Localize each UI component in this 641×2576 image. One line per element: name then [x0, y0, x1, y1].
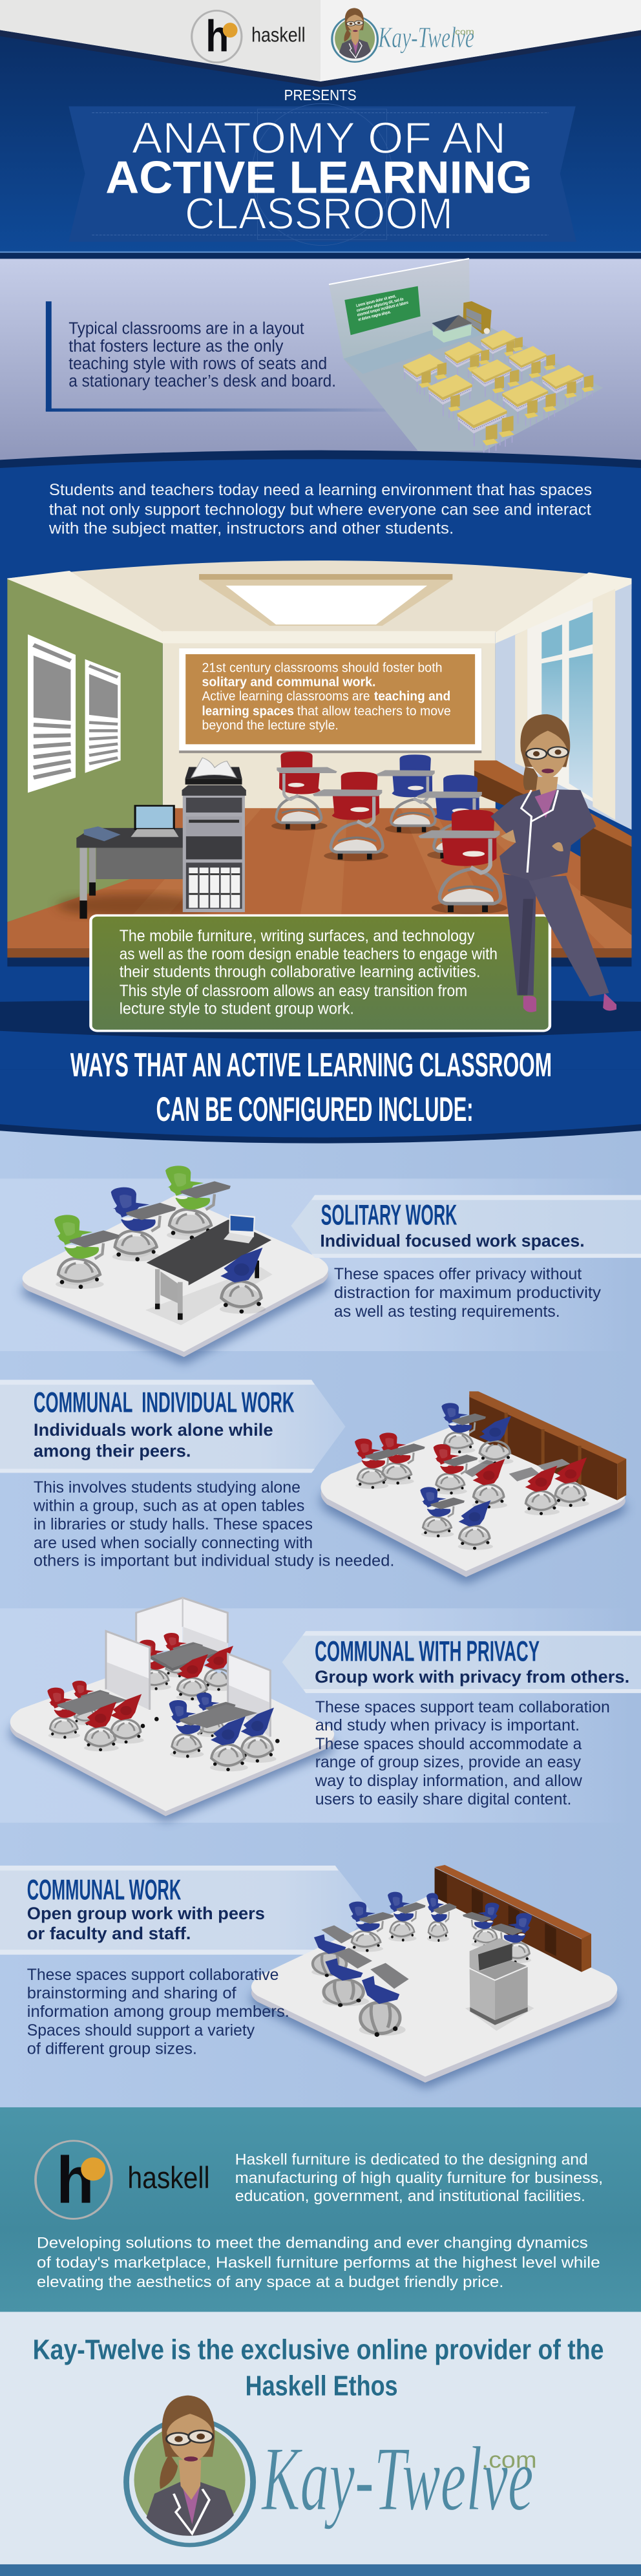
communal work subheading: or faculty and staff. [27, 1924, 191, 1943]
communal work podium [465, 1938, 534, 2031]
communal individual body: in libraries or study halls. These spaces [34, 1515, 313, 1533]
privacy banner [282, 1631, 641, 1693]
ceiling [7, 560, 631, 644]
communal individual banner [0, 1379, 346, 1473]
intro text: with the subject matter, instructors and other students. [48, 518, 454, 537]
panel: haskell teal [0, 2107, 641, 2312]
solitary body: These spaces offer privacy without [334, 1265, 582, 1283]
privacy platform [10, 1653, 334, 1823]
typical classroom text: a stationary teacher’s desk and board. [68, 372, 336, 390]
communal work body: information among group members. [27, 2003, 289, 2021]
section heading [70, 1047, 552, 1129]
title: ACTIVE LEARNING [105, 152, 532, 203]
communal individual bookshelf [469, 1391, 626, 1500]
footer heading: Haskell Ethos [246, 2370, 398, 2401]
panel: communal work: COMMUNAL WORK [27, 1873, 182, 1906]
panel: solitary work [0, 1166, 641, 1365]
privacy body: way to display information, and allow [315, 1772, 582, 1789]
communal individual subheading: among their peers. [34, 1441, 191, 1461]
Kay-Twelve logo: .com [452, 28, 474, 37]
blue title background [0, 0, 641, 253]
haskell logo large: haskell [127, 2160, 210, 2195]
title ribbon [68, 103, 576, 246]
whiteboard text: 21st century classrooms should foster both [202, 660, 443, 675]
left table group [47, 1681, 144, 1751]
communal individual body: This involves students studying alone [34, 1478, 300, 1496]
whiteboard text: Active learning classrooms are [202, 688, 370, 703]
blue heading band top [0, 1070, 641, 1137]
traditional classroom illustration: eiusmod tempor incididunt ut labore [357, 301, 409, 317]
haskell logo large [36, 2141, 210, 2219]
presents label: PRESENTS [284, 87, 357, 104]
Kay-Twelve logo [332, 8, 474, 62]
Kay-Twelve logo large: .com [481, 2447, 537, 2473]
communal work body: brainstorming and sharing of [27, 1984, 236, 2002]
callout text [120, 927, 498, 1017]
communal work banner [0, 1866, 370, 1955]
communal individual subheading [34, 1420, 273, 1461]
haskell paragraph [37, 2234, 600, 2291]
footer section [0, 2107, 641, 2576]
left divider [106, 1631, 150, 1710]
teacher figure [490, 714, 616, 1012]
wood counter [474, 760, 631, 935]
right wall and window [496, 584, 631, 829]
ceiling light [199, 574, 452, 626]
solitary body [334, 1265, 602, 1320]
callout text: their students through collaborative learning activities. [120, 963, 480, 981]
typical classroom text: teaching style with rows of seats and [68, 354, 327, 373]
haskell description [235, 2151, 603, 2205]
solitary furniture [54, 1166, 273, 1325]
communal work subheading: Open group work with peers [27, 1904, 265, 1923]
wall windows [28, 634, 121, 793]
divider casters [141, 1717, 280, 1743]
Kay-Twelve logo: Kay-Twelve [378, 22, 474, 54]
bracket [46, 301, 406, 412]
callout text: lecture style to student group work. [120, 999, 354, 1017]
top table group [139, 1633, 235, 1701]
panel: typical classroom [0, 259, 641, 464]
solitary banner [291, 1195, 641, 1258]
communal individual body: are used when socially connecting with [34, 1534, 313, 1552]
haskell logo: h [205, 11, 229, 61]
haskell paragraph: elevating the aesthetics of any space at a budget friendly price. [37, 2273, 503, 2291]
solitary body: as well as testing requirements. [334, 1303, 560, 1320]
right divider [228, 1654, 270, 1737]
panel: classroom room illustration [0, 556, 641, 1073]
typical classroom text: Typical classrooms are in a layout [68, 319, 304, 338]
whiteboard text: solitary and communal work. [202, 674, 375, 689]
haskell logo large: h [56, 2144, 94, 2217]
callout text: as well as the room design enable teachers to engage with [120, 945, 498, 963]
communal individual chairs [355, 1403, 589, 1550]
title [105, 112, 532, 239]
panel: solitary work: SOLITARY WORK [321, 1198, 457, 1231]
communal work body: These spaces support collaborative [27, 1966, 278, 1983]
communal work bookshelf [435, 1865, 591, 1972]
panel: kay-twelve footer [0, 2312, 641, 2576]
divider band [0, 251, 641, 259]
footer heading [33, 2334, 604, 2401]
traditional classroom illustration: Lorem ipsum dolor sit amet, [355, 294, 397, 308]
communal individual body: others is important but individual study is needed. [34, 1552, 395, 1570]
communal work chairs [311, 1892, 532, 2037]
title: ANATOMY OF AN [132, 112, 506, 163]
configurations section [0, 1047, 641, 1584]
privacy and communal section [0, 1598, 641, 2089]
blue band under lavender panel [0, 451, 641, 556]
back wall [163, 643, 496, 811]
title: CLASSROOM [185, 188, 453, 239]
whiteboard text: learning spaces [202, 703, 294, 718]
whiteboard [179, 648, 481, 753]
teacher desk [58, 805, 213, 919]
green callout box [90, 915, 550, 1031]
intro text [48, 480, 592, 537]
panel: communal individual work [0, 1379, 626, 1584]
whiteboard text [202, 660, 451, 732]
traditional classroom illustration: et dolore magna aliqua. [358, 310, 392, 323]
page light blue background [0, 1099, 641, 2114]
communal work body: Spaces should support a variety [27, 2021, 255, 2039]
communal work body: of different group sizes. [27, 2039, 197, 2058]
haskell logo [192, 10, 306, 63]
whiteboard text: beyond the lecture style. [202, 718, 339, 732]
panel: communal individual work: COMMUNAL INDIVIDUAL WORK [34, 1386, 295, 1418]
solitary platform [23, 1195, 328, 1365]
right table group [169, 1692, 277, 1771]
logo header band [0, 0, 641, 87]
whiteboard text: teaching and [374, 688, 450, 703]
dark band behind callout [0, 999, 641, 1039]
callout text: The mobile furniture, writing surfaces, and technology [120, 927, 475, 944]
header and title section [0, 0, 641, 556]
communal work platform [251, 1893, 617, 2089]
whiteboard text: that allow teachers to move [297, 703, 451, 718]
privacy furniture [47, 1598, 280, 1771]
back dividers [136, 1598, 227, 1657]
communal individual platform [320, 1420, 625, 1584]
privacy body: users to easily share digital content. [315, 1790, 571, 1808]
blue heading band [0, 1070, 641, 1144]
traditional classroom illustration [329, 259, 603, 455]
panel: communal work [0, 1865, 617, 2089]
left green wall [7, 579, 163, 922]
Kay-Twelve logo large [126, 2396, 537, 2545]
haskell logo: haskell [251, 24, 306, 47]
communal individual body [33, 1478, 395, 1570]
classroom chairs [271, 752, 507, 914]
privacy body: range of group sizes, provide an easy [315, 1753, 582, 1771]
wood floor [7, 808, 631, 966]
communal individual body: within a group, such as at open tables [33, 1496, 304, 1515]
communal work subheading [27, 1904, 265, 1943]
printer cart with book and binders [182, 758, 246, 912]
typical classroom text: that fosters lecture as the only [68, 337, 284, 356]
bottom blue strip [0, 2564, 641, 2576]
blue background [0, 556, 641, 1073]
typical classroom text [68, 319, 336, 390]
communal individual tablets [464, 1459, 571, 1482]
communal work furniture [311, 1865, 591, 2037]
communal individual subheading: Individuals work alone while [34, 1420, 273, 1440]
privacy body [315, 1698, 610, 1808]
callout text: This style of classroom allows an easy transition from [120, 982, 467, 999]
blue intro section [0, 459, 641, 556]
traditional classroom illustration: consectetur adipiscing elit, sed do [356, 297, 404, 313]
communal work body [27, 1966, 289, 2058]
privacy body: and study when privacy is important. [315, 1716, 580, 1734]
panel: communal with privacy [0, 1598, 641, 1823]
